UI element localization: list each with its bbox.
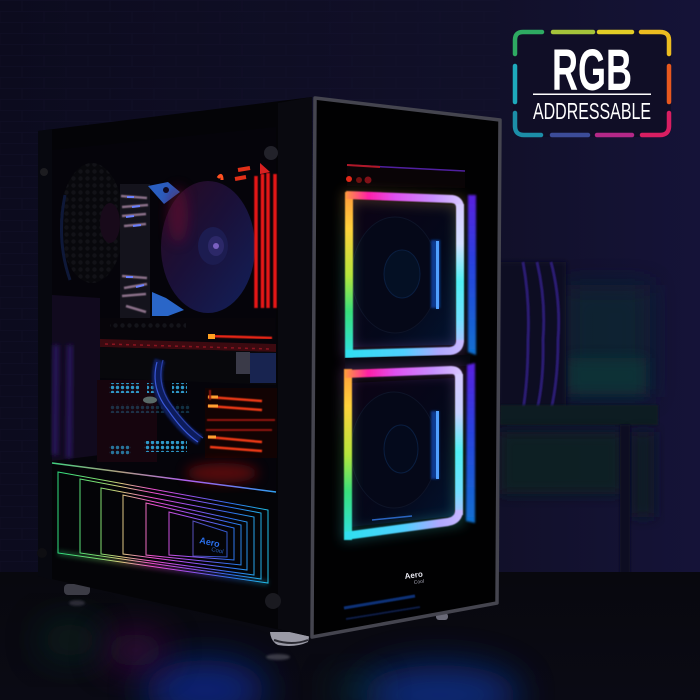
motherboard lower tray bbox=[52, 295, 100, 461]
front logo sub-text: Cool bbox=[413, 579, 424, 586]
large CPU fan bbox=[161, 181, 255, 313]
upper front fan bbox=[351, 200, 455, 347]
upper side light strip bbox=[468, 195, 476, 355]
power cables bbox=[143, 360, 203, 442]
side panel logo: Aero bbox=[199, 535, 221, 549]
rear exhaust fan bbox=[60, 163, 124, 283]
upper RGB ring bbox=[346, 192, 460, 358]
case feet bbox=[64, 584, 448, 646]
reflective purple strip bbox=[55, 345, 70, 458]
front panel frame bbox=[312, 98, 500, 637]
background desk and chair bbox=[498, 262, 658, 575]
side window interior bbox=[52, 127, 277, 492]
upper ring glow bbox=[348, 196, 460, 354]
badge background bbox=[513, 30, 671, 137]
front lower mesh lights bbox=[344, 596, 420, 619]
lower ring glow bbox=[347, 370, 459, 536]
lower RGB ring bbox=[345, 369, 459, 540]
glow on neon bottom edge bbox=[58, 553, 268, 583]
lower fan grille bbox=[345, 355, 470, 369]
side panel logo sub-text: Cool bbox=[211, 547, 224, 556]
cooler heatsink bbox=[120, 184, 150, 318]
red RAM modules bbox=[218, 163, 275, 308]
upper fan grille bbox=[346, 165, 465, 188]
badge divider bbox=[533, 94, 651, 95]
floor bbox=[0, 572, 700, 700]
front logo: Aero bbox=[404, 570, 423, 581]
PC case side body bbox=[38, 97, 312, 637]
shroud light line bbox=[52, 463, 276, 492]
nested neon rectangles bbox=[58, 472, 268, 583]
RGB addressable badge bbox=[513, 30, 671, 137]
lower front fan bbox=[350, 378, 454, 527]
red floor reflection bbox=[186, 463, 258, 483]
badge subtitle: ADDRESSABLE bbox=[533, 98, 651, 124]
lower side light strip bbox=[466, 363, 475, 523]
badge title: RGB bbox=[552, 38, 632, 103]
drive cage with cyan vents bbox=[97, 380, 190, 462]
case screws bbox=[37, 146, 281, 609]
lower red graphics cards bbox=[205, 388, 277, 458]
badge segmented rainbow border bbox=[515, 32, 669, 135]
upper graphics card bbox=[100, 318, 276, 385]
blue cooler brackets bbox=[148, 182, 184, 316]
